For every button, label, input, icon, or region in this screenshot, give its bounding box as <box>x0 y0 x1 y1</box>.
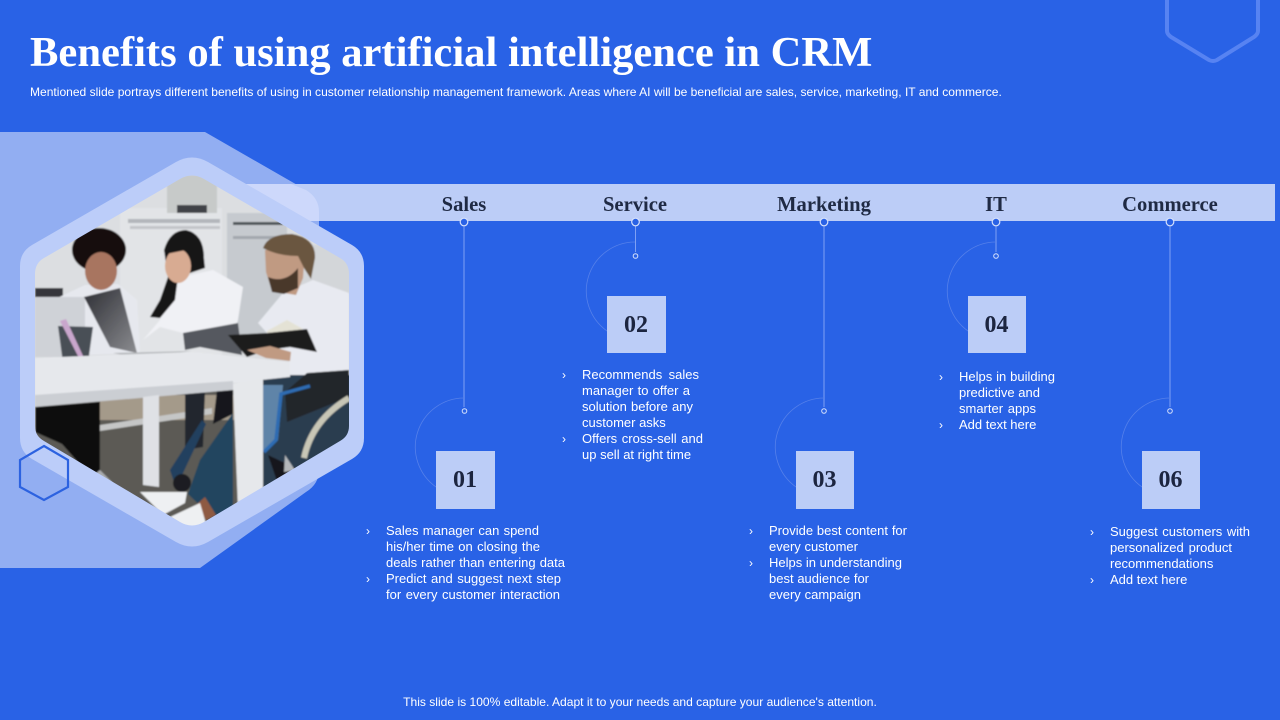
text block: IT benefits: Add text here <box>959 417 1036 432</box>
main laptop <box>84 288 192 358</box>
text block: commerce benefits: Suggest customers with <box>1110 524 1250 539</box>
scene below table <box>35 389 238 526</box>
team photo <box>30 170 355 535</box>
standing woman <box>143 230 243 355</box>
number box 04 <box>968 296 1026 353</box>
wheelchair <box>262 369 349 486</box>
text block: service benefits: Offers cross-sell and <box>582 431 703 446</box>
heading: Commerce: Commerce <box>1122 194 1218 216</box>
number box 01 <box>436 451 495 509</box>
connector 03 <box>775 218 828 487</box>
connector 02 <box>586 218 639 331</box>
text block: IT benefits <box>939 369 1055 432</box>
number box 02 <box>607 296 666 353</box>
text block: marketing benefits: every customer <box>769 539 858 554</box>
connector 01 <box>415 218 468 487</box>
text block: service benefits <box>562 367 703 462</box>
text block: commerce benefits: › <box>1090 525 1094 539</box>
heading: Service: Service <box>603 194 667 216</box>
text block: service benefits: up sell at right time <box>582 447 691 462</box>
left woman <box>59 227 127 354</box>
text block: commerce benefits: recommendations <box>1110 556 1213 571</box>
text block: marketing benefits <box>749 523 907 602</box>
number box 04: 04 <box>984 312 1008 338</box>
number box 01: 01 <box>453 467 477 493</box>
text block: commerce benefits: Add text here <box>1110 572 1187 587</box>
footer note: This slide is 100% editable. Adapt it to your needs and capture your audience's attention. <box>403 695 877 709</box>
outer pale hexagon panel <box>0 132 319 568</box>
heading: Sales: Sales <box>442 194 486 216</box>
text block: service benefits: Recommends sales <box>582 367 699 382</box>
text block: sales benefits <box>366 523 565 602</box>
text block: service benefits: › <box>562 432 566 446</box>
pen holder <box>58 319 93 363</box>
title: Benefits of using artificial intelligence in CRM <box>30 29 872 76</box>
seated man <box>228 234 349 387</box>
text block: IT benefits: › <box>939 418 943 432</box>
text block: sales benefits: Predict and suggest next step <box>386 571 561 586</box>
text block: sales benefits: › <box>366 572 370 586</box>
text block: marketing benefits: Helps in understanding <box>769 555 902 570</box>
text block: IT benefits: Helps in building <box>959 369 1055 384</box>
number box 02: 02 <box>624 312 648 338</box>
connector 04 <box>947 218 1000 331</box>
heading: Marketing: Marketing <box>777 194 871 216</box>
text block: marketing benefits: › <box>749 524 753 538</box>
text block: service benefits: manager to offer a <box>582 383 690 398</box>
text block: service benefits: › <box>562 368 566 382</box>
text block: service benefits: solution before any <box>582 399 693 414</box>
small hexagon outline <box>20 446 68 500</box>
text block: IT benefits: smarter apps <box>959 401 1036 416</box>
text block: sales benefits: › <box>366 524 370 538</box>
number box 06 <box>1142 451 1200 509</box>
text block: sales benefits: for every customer interaction <box>386 587 560 602</box>
number box 06: 06 <box>1158 467 1182 493</box>
text block: sales benefits: deals rather than entering data <box>386 555 565 570</box>
number box 03 <box>796 451 854 509</box>
category header bar <box>246 184 1275 221</box>
text block: sales benefits: Sales manager can spend <box>386 523 539 538</box>
table <box>35 352 290 510</box>
text block: commerce benefits <box>1090 524 1250 587</box>
text block: marketing benefits: every campaign <box>769 587 861 602</box>
text block: service benefits: customer asks <box>582 415 666 430</box>
connector 06 <box>1121 218 1174 487</box>
front laptop <box>35 297 85 357</box>
photo frame hexagon <box>20 158 364 546</box>
heading: IT: IT <box>985 194 1007 216</box>
decorative hexagon outline top right <box>1167 0 1258 61</box>
text block: marketing benefits: Provide best content for <box>769 523 907 538</box>
text block: commerce benefits: › <box>1090 573 1094 587</box>
subtitle: Mentioned slide portrays different benefits of using in customer relationship management framework. Areas where AI will be beneficial are sales, service, marketing, IT and commerce. <box>30 85 1002 99</box>
text block: sales benefits: his/her time on closing the <box>386 539 540 554</box>
text block: marketing benefits: best audience for <box>769 571 869 586</box>
text block: commerce benefits: personalized product <box>1110 540 1232 555</box>
text block: marketing benefits: › <box>749 556 753 570</box>
text block: IT benefits: › <box>939 370 943 384</box>
number box 03: 03 <box>812 467 836 493</box>
text block: IT benefits: predictive and <box>959 385 1040 400</box>
